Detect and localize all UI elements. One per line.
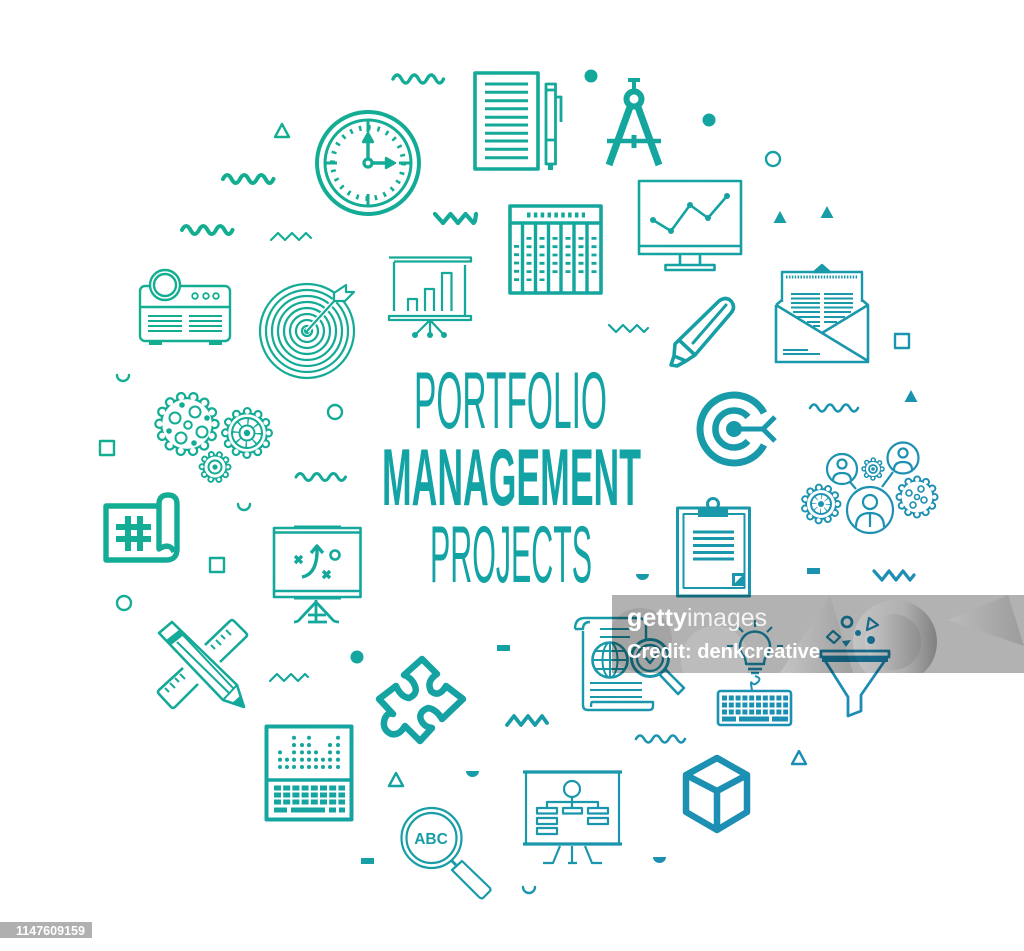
icon: table calendar: [510, 206, 601, 293]
watermark text: Credit: denkcreative: [627, 641, 820, 663]
icon: drawing compass: [607, 80, 661, 165]
icon: projector: [140, 270, 230, 345]
outlined triangles, rings and squares: [100, 124, 909, 893]
icon: strategy board: [274, 527, 360, 622]
icon: ABC magnifier: [402, 808, 490, 898]
icon: org chart presentation board: [523, 772, 622, 863]
text: PORTFOLIO: [414, 356, 607, 446]
icon: lightbulb and keyboard: [718, 620, 791, 725]
icon: presentation with bar chart: [389, 258, 471, 338]
text: PROJECTS: [430, 510, 592, 600]
icon: crossed pencil and ruler: [158, 620, 247, 708]
icon: target bullseye with arrow: [260, 284, 354, 378]
icon: clock: [317, 112, 419, 214]
icon: cube: [686, 758, 747, 830]
icon: bold target with arrow: [700, 395, 775, 463]
icon: people and gears network: [804, 442, 934, 533]
watermark text: images: [687, 604, 767, 632]
icon: funnel with shapes: [821, 617, 889, 716]
icon: clipboard: [678, 498, 750, 596]
gear: small: [202, 454, 228, 480]
text: MANAGEMENT: [382, 433, 641, 523]
watermark text: [627, 604, 820, 663]
zigzags: [270, 214, 914, 725]
icon: document with globe and magnifier: [575, 618, 684, 710]
icon set ring: [106, 73, 934, 898]
icon: blueprint with hash: [106, 495, 177, 560]
watermark text: getty: [627, 604, 687, 632]
watermark banner: [612, 595, 1024, 673]
icon: gears: [160, 396, 268, 480]
squiggles: [182, 75, 858, 742]
image id tag: 1147609159: [16, 923, 85, 938]
icon: puzzle piece: [379, 659, 463, 741]
gear: spoked: [226, 412, 268, 454]
icon: document and pen: [475, 73, 561, 170]
icon: monitor with line chart: [639, 181, 741, 270]
ruler: [158, 620, 247, 708]
icon: laptop with equaliser and keyboard: [266, 726, 352, 820]
filled shapes: [350, 70, 918, 864]
icon: ABC magnifier: ABC: [414, 831, 448, 848]
title: [382, 356, 641, 600]
icon: envelope with letter: [776, 265, 868, 362]
pencil: [159, 622, 244, 707]
icon: highlighter: [671, 298, 734, 366]
gear: large: [160, 396, 214, 452]
decorative shapes: [100, 70, 918, 893]
